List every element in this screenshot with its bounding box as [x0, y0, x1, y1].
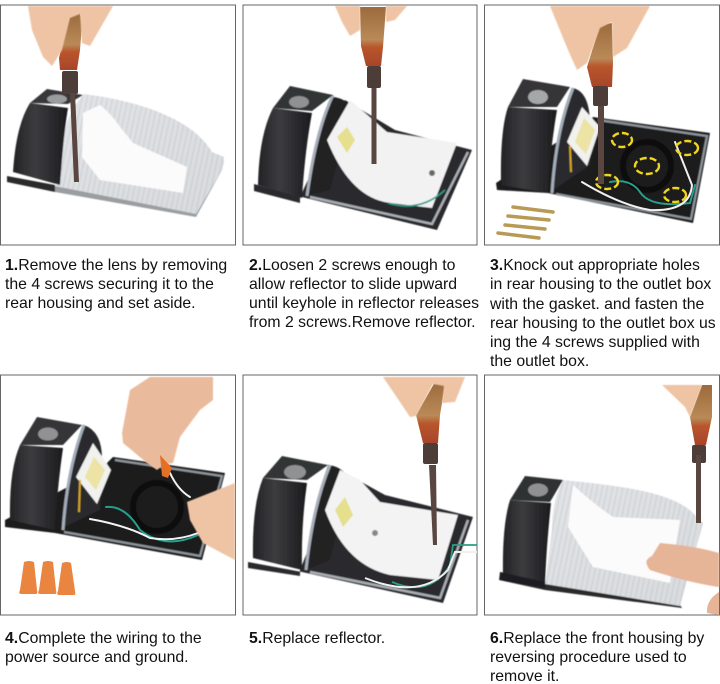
- panel: step 4 photo: [0, 375, 236, 615]
- step 2 text: until keyhole in reflector releases: [249, 295, 479, 312]
- step 1 text: the 4 screws securing it to the: [5, 276, 214, 293]
- step 1 text: rear housing and set aside.: [5, 295, 196, 312]
- step 5 text: Replace reflector.: [262, 630, 385, 647]
- wires: [90, 473, 198, 541]
- lower right hand: [707, 592, 719, 615]
- step 3 text: rear housing to the outlet box us: [490, 315, 716, 332]
- hand: [28, 6, 113, 66]
- panel: step 1 photo: [0, 5, 236, 245]
- hand: [662, 385, 702, 417]
- step 1 text: Remove the lens by removing: [18, 257, 227, 274]
- step 1 text: 1.: [5, 257, 18, 274]
- step 2 text: allow reflector to slide upward: [249, 276, 457, 293]
- hand: [383, 377, 465, 417]
- hand: [550, 6, 650, 70]
- step 2 text: Loosen 2 screws enough to: [262, 257, 455, 274]
- step 6 text: Replace the front housing by: [503, 630, 704, 647]
- step 2 text: from 2 screws.Remove reflector.: [249, 314, 476, 331]
- screwdriver: [416, 382, 445, 545]
- lamp with reflector replaced: [248, 456, 473, 603]
- panel: step 2 photo: [243, 5, 477, 245]
- lamp with front housing replaced: [499, 476, 703, 608]
- wires: [365, 545, 477, 587]
- step 4 text: Complete the wiring to the: [18, 630, 202, 647]
- wires: [582, 142, 695, 210]
- step 3 text: with the gasket. and fasten the: [489, 296, 704, 313]
- three orange wire nuts: [19, 561, 75, 595]
- hand: [335, 6, 407, 36]
- panel: step 6 photo: [484, 375, 720, 615]
- step 3 text: 3.: [490, 257, 503, 274]
- step 2 text: 2.: [249, 257, 262, 274]
- screwdriver: [59, 13, 82, 182]
- panel: step 5 photo: [243, 375, 477, 615]
- screwdriver: [587, 23, 613, 184]
- step 3 text: in rear housing to the outlet box: [490, 276, 711, 293]
- step 4 text: power source and ground.: [5, 649, 189, 666]
- lamp with lens on: [7, 89, 224, 217]
- fingers: [646, 543, 719, 587]
- step 4 text: 4.: [5, 630, 18, 647]
- screwdriver: [690, 385, 712, 523]
- four brass screws: [498, 207, 553, 238]
- step 3 text: Knock out appropriate holes: [503, 257, 700, 274]
- step 3 text: the outlet box.: [490, 353, 589, 370]
- step 5 text: 5.: [249, 630, 262, 647]
- lower hand: [187, 483, 235, 560]
- orange connector in hand: [160, 455, 172, 478]
- step 6 text: 6.: [490, 630, 503, 647]
- yellow dashed knockout circles: [596, 133, 698, 202]
- panel: step 3 photo: [484, 5, 720, 245]
- upper hand: [122, 377, 213, 470]
- lamp with reflector loose: [254, 86, 472, 230]
- screwdriver: [360, 7, 386, 164]
- step 3 text: ing the 4 screws supplied with: [490, 334, 700, 351]
- opened lamp housing: [496, 79, 710, 223]
- step 6 text: reversing procedure used to: [490, 649, 687, 666]
- lamp being wired: [5, 417, 225, 560]
